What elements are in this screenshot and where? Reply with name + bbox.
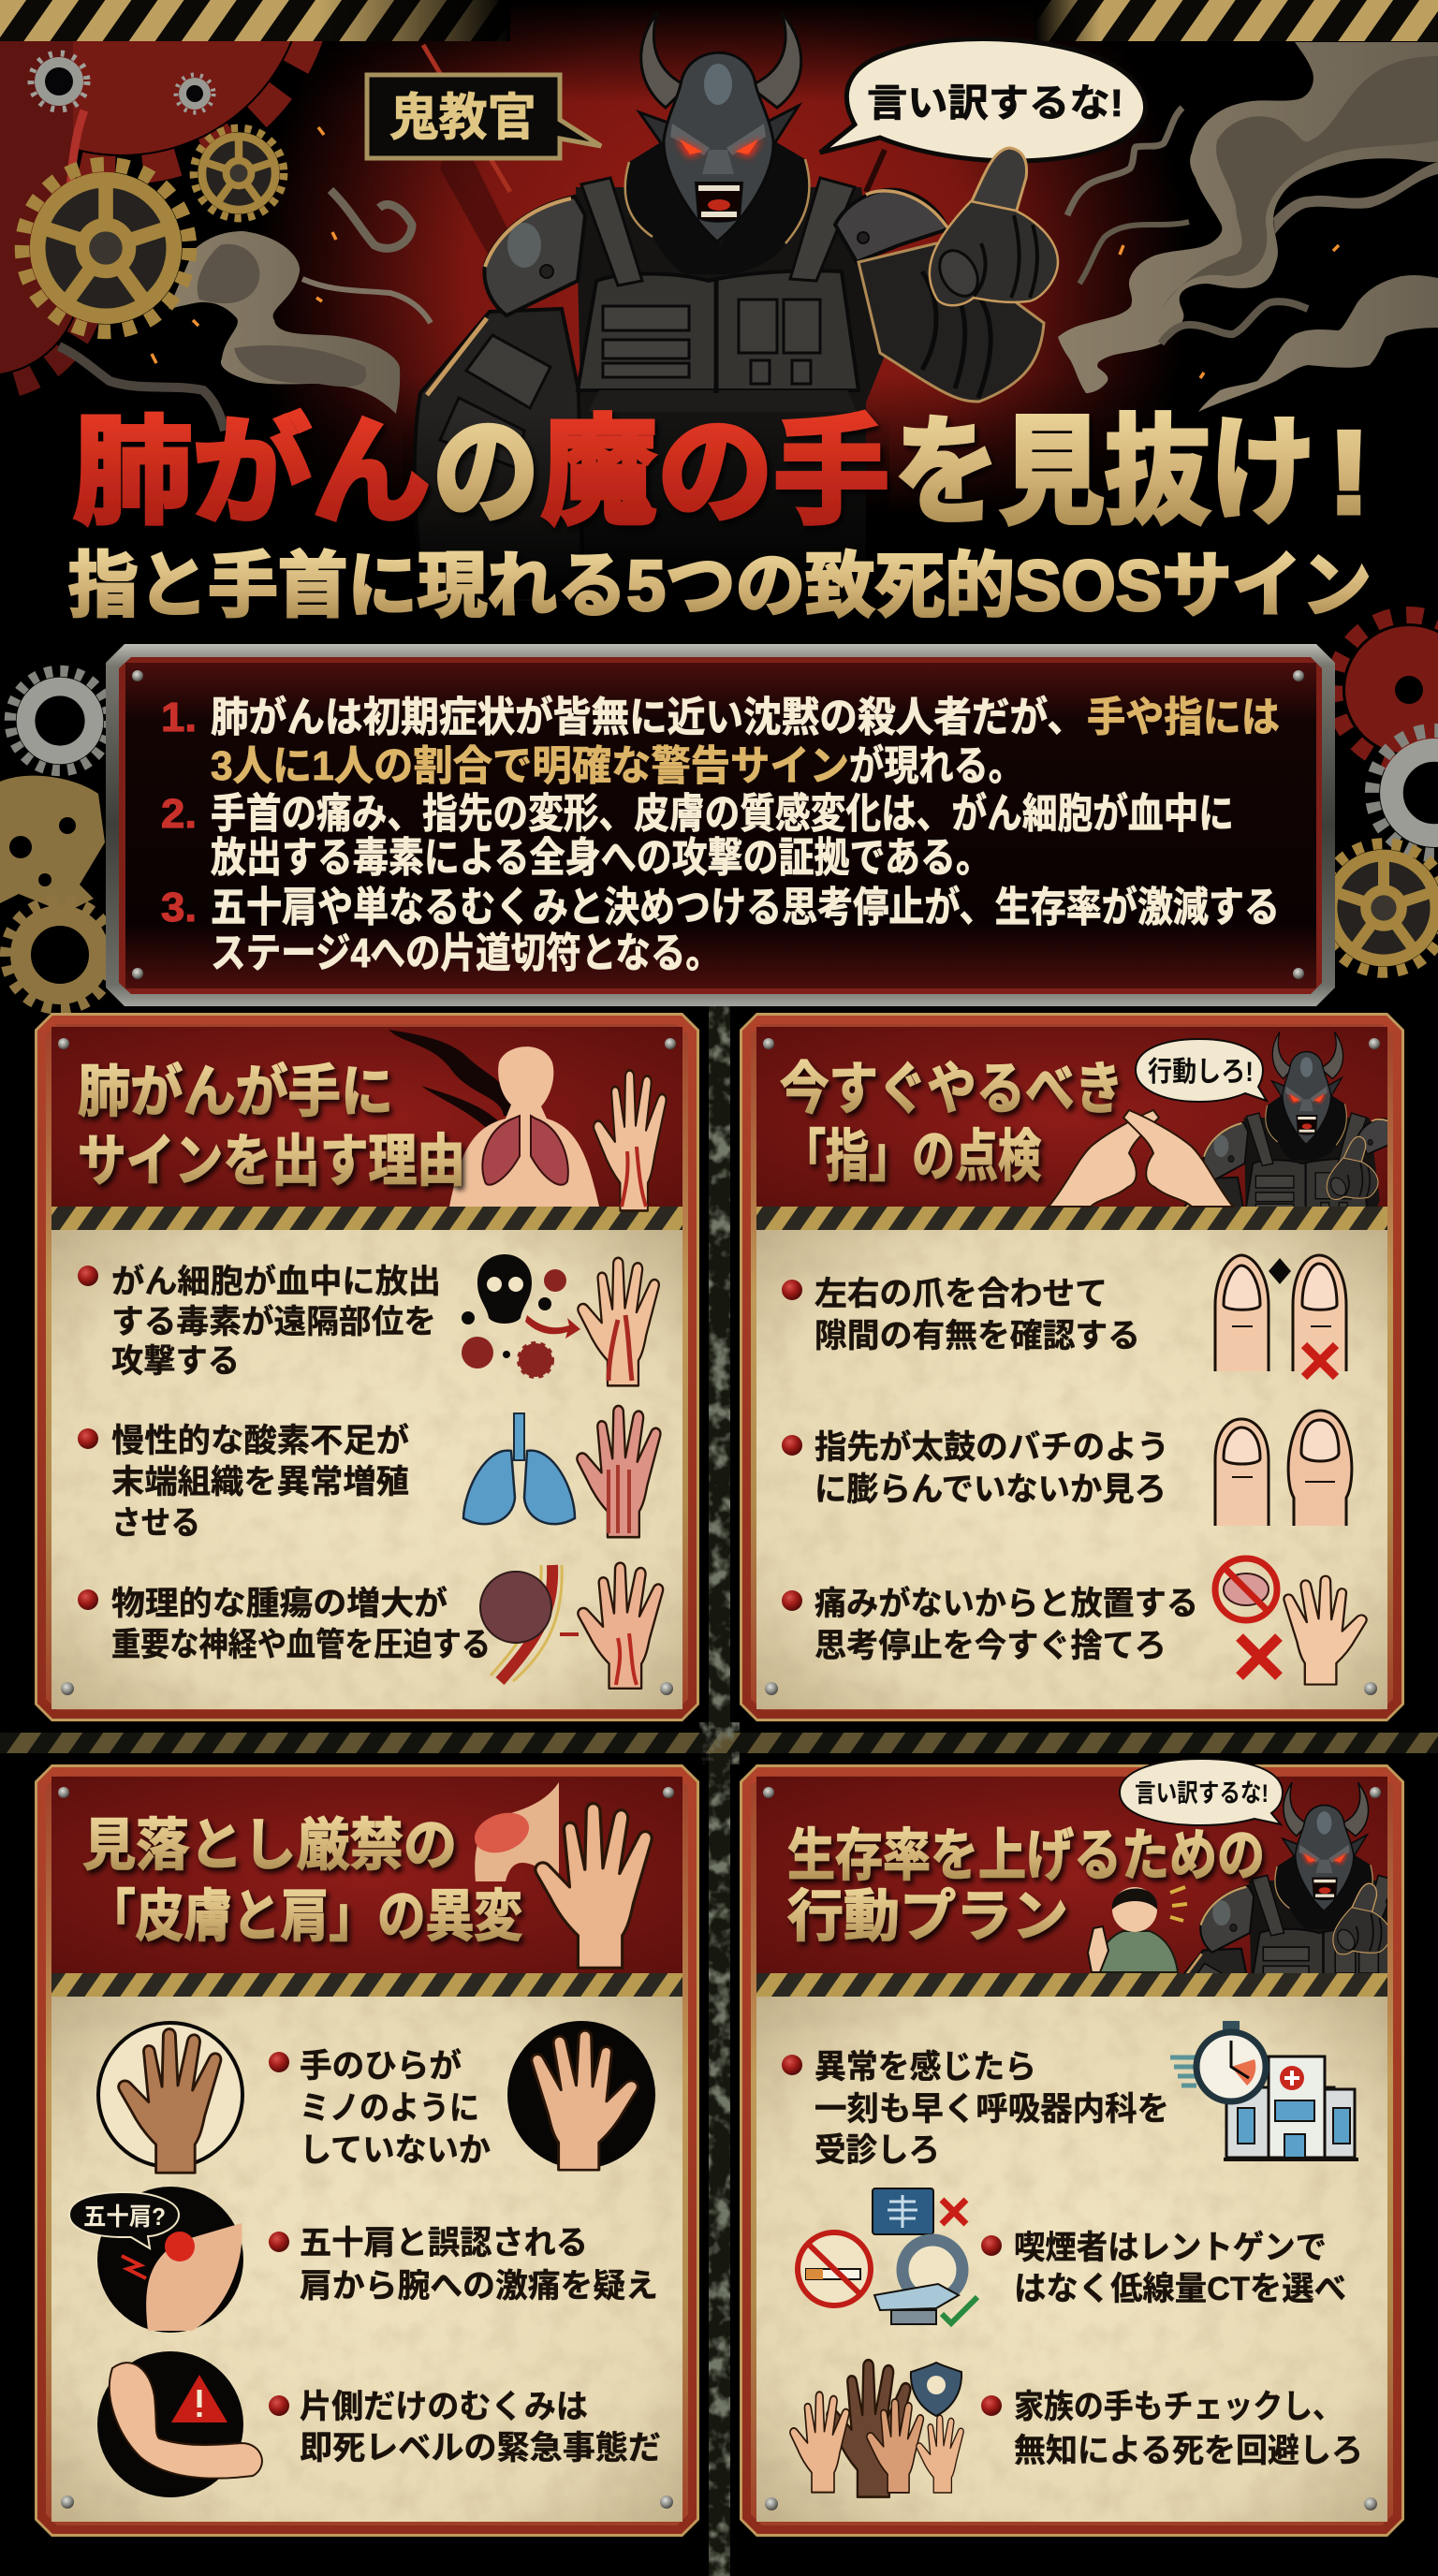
item: clubbing: に膨らんでいないか見ろ	[814, 1471, 1167, 1508]
icon: nails with gap	[1215, 1255, 1346, 1377]
item: family check	[981, 2389, 1363, 2469]
icon: shoulder pain circle	[69, 2187, 243, 2333]
summary plaque	[106, 644, 1335, 1006]
heading	[82, 1814, 522, 1948]
speech bubble: 言い訳するな!	[867, 81, 1123, 124]
item: tumor pressure: 重要な神経や血管を圧迫する	[111, 1627, 491, 1663]
heading: 生存率を上げるための	[787, 1824, 1265, 1887]
panel: why lung cancer signals in hands	[35, 1013, 699, 1721]
item: oxygen deprivation: 末端組織を異常増殖	[111, 1464, 409, 1500]
item: clubbing	[782, 1429, 1169, 1508]
speech bubble	[1120, 1759, 1283, 1825]
summary point 1: 1.	[161, 695, 197, 740]
title: の	[433, 406, 539, 538]
item: low-dose CT: 喫煙者はレントゲンで	[1014, 2230, 1327, 2266]
item: oxygen deprivation	[78, 1423, 409, 1542]
heading: サインを出す理由	[78, 1130, 465, 1193]
item: stop ignoring: 思考停止を今すぐ捨てろ	[814, 1628, 1167, 1664]
item: toxins: 攻撃する	[111, 1343, 240, 1380]
item: palm: 手のひらが	[300, 2048, 462, 2085]
item: toxins	[78, 1264, 441, 1380]
item: nail gap	[782, 1276, 1140, 1354]
summary point 1: 3人に1人の割合で明確な警告サイン	[211, 743, 849, 789]
summary point 3: 3.	[161, 885, 197, 930]
summary point 1	[161, 695, 1280, 789]
bullet holes	[31, 53, 213, 112]
illustration: person	[1088, 1887, 1187, 1972]
item: tumor pressure	[78, 1586, 491, 1663]
label: 鬼教官: 鬼教官	[389, 90, 536, 146]
hazard stripes top	[0, 0, 1438, 41]
heading: 肺がんが手に	[78, 1061, 393, 1123]
item: one-side swelling: 即死レベルの緊急事態だ	[300, 2430, 661, 2466]
title: 肺がん	[73, 406, 431, 538]
item: stop ignoring: 痛みがないからと放置する	[814, 1586, 1198, 1622]
smoke right	[1058, 42, 1438, 412]
red gear backdrop left	[0, 0, 320, 388]
item: tumor pressure: 物理的な腫瘍の増大が	[111, 1586, 448, 1622]
icon: skull, toxins and hand	[462, 1254, 659, 1385]
icon: healthy palm circle	[507, 2021, 655, 2170]
summary point 3: ステージ4への片道切符となる。	[211, 930, 721, 976]
title: !	[1328, 406, 1371, 538]
summary point 1: 肺がんは初期症状が皆無に近い沈黙の殺人者だが、	[211, 695, 1085, 740]
subtitle: 指と手首に現れる5つの致死的SOSサイン	[68, 547, 1372, 626]
heading: 今すぐやるべき	[780, 1058, 1123, 1120]
illustration: demon	[1183, 1032, 1387, 1207]
icon: no brain, X, hand	[1215, 1559, 1367, 1685]
summary point 2: 手首の痛み、指先の変形、皮膚の質感変化は、がん細胞が血中に	[211, 791, 1234, 837]
icon: swollen arm circle	[97, 2351, 262, 2497]
illustration: sore shoulder	[469, 1782, 559, 1881]
icon: family hands and shield	[790, 2360, 963, 2497]
item: nail gap: 左右の爪を合わせて	[814, 1276, 1108, 1312]
item: palm: していないか	[300, 2132, 491, 2169]
item: family check: 無知による死を回避しろ	[1014, 2433, 1363, 2469]
summary point 1: が現れる。	[849, 743, 1023, 789]
heading: 見落とし厳禁の	[82, 1814, 457, 1877]
item: toxins: がん細胞が血中に放出	[111, 1264, 441, 1300]
item: toxins: する毒素が遠隔部位を	[111, 1304, 436, 1340]
item: oxygen deprivation: させる	[111, 1505, 200, 1542]
item: one-side swelling: 片側だけのむくみは	[300, 2389, 588, 2425]
icon: shoulder pain circle: 五十肩?	[83, 2203, 166, 2231]
item: nail gap: 隙間の有無を確認する	[814, 1318, 1140, 1354]
heading: 「皮膚と肩」の異変	[87, 1885, 522, 1948]
demon instructor	[403, 12, 1058, 599]
title	[73, 406, 1371, 538]
embers and red streaks	[152, 45, 1339, 378]
item: low-dose CT	[981, 2230, 1346, 2307]
item: see doctor: 異常を感じたら	[814, 2049, 1036, 2086]
icon: normal and clubbed fingers	[1215, 1411, 1352, 1526]
item: stop ignoring	[782, 1586, 1198, 1664]
illustration: demon	[1183, 1782, 1387, 1973]
summary point 2: 2.	[161, 791, 197, 837]
gears top left	[22, 128, 284, 331]
label: 鬼教官	[367, 75, 601, 158]
icon: hand	[536, 1804, 652, 1968]
item: family check: 家族の手もチェックし、	[1014, 2389, 1343, 2425]
icon: tumor, vessels, hand	[480, 1563, 663, 1689]
speech bubble	[1136, 1039, 1267, 1102]
item: clubbing: 指先が太鼓のバチのよう	[814, 1429, 1169, 1466]
heading	[787, 1824, 1265, 1948]
speech bubble	[820, 39, 1146, 161]
item: oxygen deprivation: 慢性的な酸素不足が	[111, 1423, 409, 1459]
gears beside summary	[0, 615, 1438, 1009]
summary point 3: 五十肩や単なるむくみと決めつける思考停止が、生存率が激減する	[211, 885, 1280, 930]
item: palm: ミノのように	[300, 2090, 479, 2127]
item: frozen shoulder	[269, 2225, 658, 2305]
panel: finger check	[740, 1013, 1407, 1721]
item: frozen shoulder: 肩から腕への激痛を疑え	[300, 2268, 658, 2305]
icon: stopwatch and hospital	[1170, 2021, 1358, 2159]
title: 魔の手	[541, 406, 889, 538]
heading	[78, 1061, 465, 1193]
item: one-side swelling	[269, 2389, 661, 2466]
icon: hand with veins	[594, 1070, 666, 1210]
illustration: touching fingers	[1049, 1110, 1233, 1207]
illustration: torso with smoke and lungs	[389, 1030, 599, 1207]
title: を見抜け	[894, 406, 1315, 538]
heading: 「指」の点検	[783, 1125, 1041, 1188]
item: palm	[269, 2048, 491, 2169]
item: see doctor	[782, 2049, 1169, 2169]
summary point 1: 手や指には	[1087, 695, 1280, 740]
item: see doctor: 受診しろ	[814, 2132, 940, 2169]
icon: scaly palm circle	[98, 2023, 242, 2173]
speech bubble: 行動しろ!	[1148, 1057, 1254, 1088]
panel: action plan	[740, 1759, 1438, 2537]
item: low-dose CT: はなく低線量CTを選べ	[1014, 2271, 1346, 2307]
summary point 2: 放出する毒素による全身への攻撃の証拠である。	[211, 835, 991, 881]
icon: blue lungs and red hand	[463, 1406, 660, 1537]
item: see doctor: 一刻も早く呼吸器内科を	[814, 2091, 1169, 2128]
icon: no smoking, x-ray, CT	[798, 2188, 977, 2324]
heading: 行動プラン	[787, 1885, 1068, 1948]
panel: skin and shoulder	[35, 1764, 699, 2537]
smoke left	[59, 190, 431, 431]
summary point 3	[161, 885, 1280, 976]
heading	[780, 1058, 1123, 1188]
speech bubble: 言い訳するな!	[1135, 1779, 1269, 1808]
item: frozen shoulder: 五十肩と誤認される	[300, 2225, 588, 2261]
summary point 2	[161, 791, 1234, 881]
